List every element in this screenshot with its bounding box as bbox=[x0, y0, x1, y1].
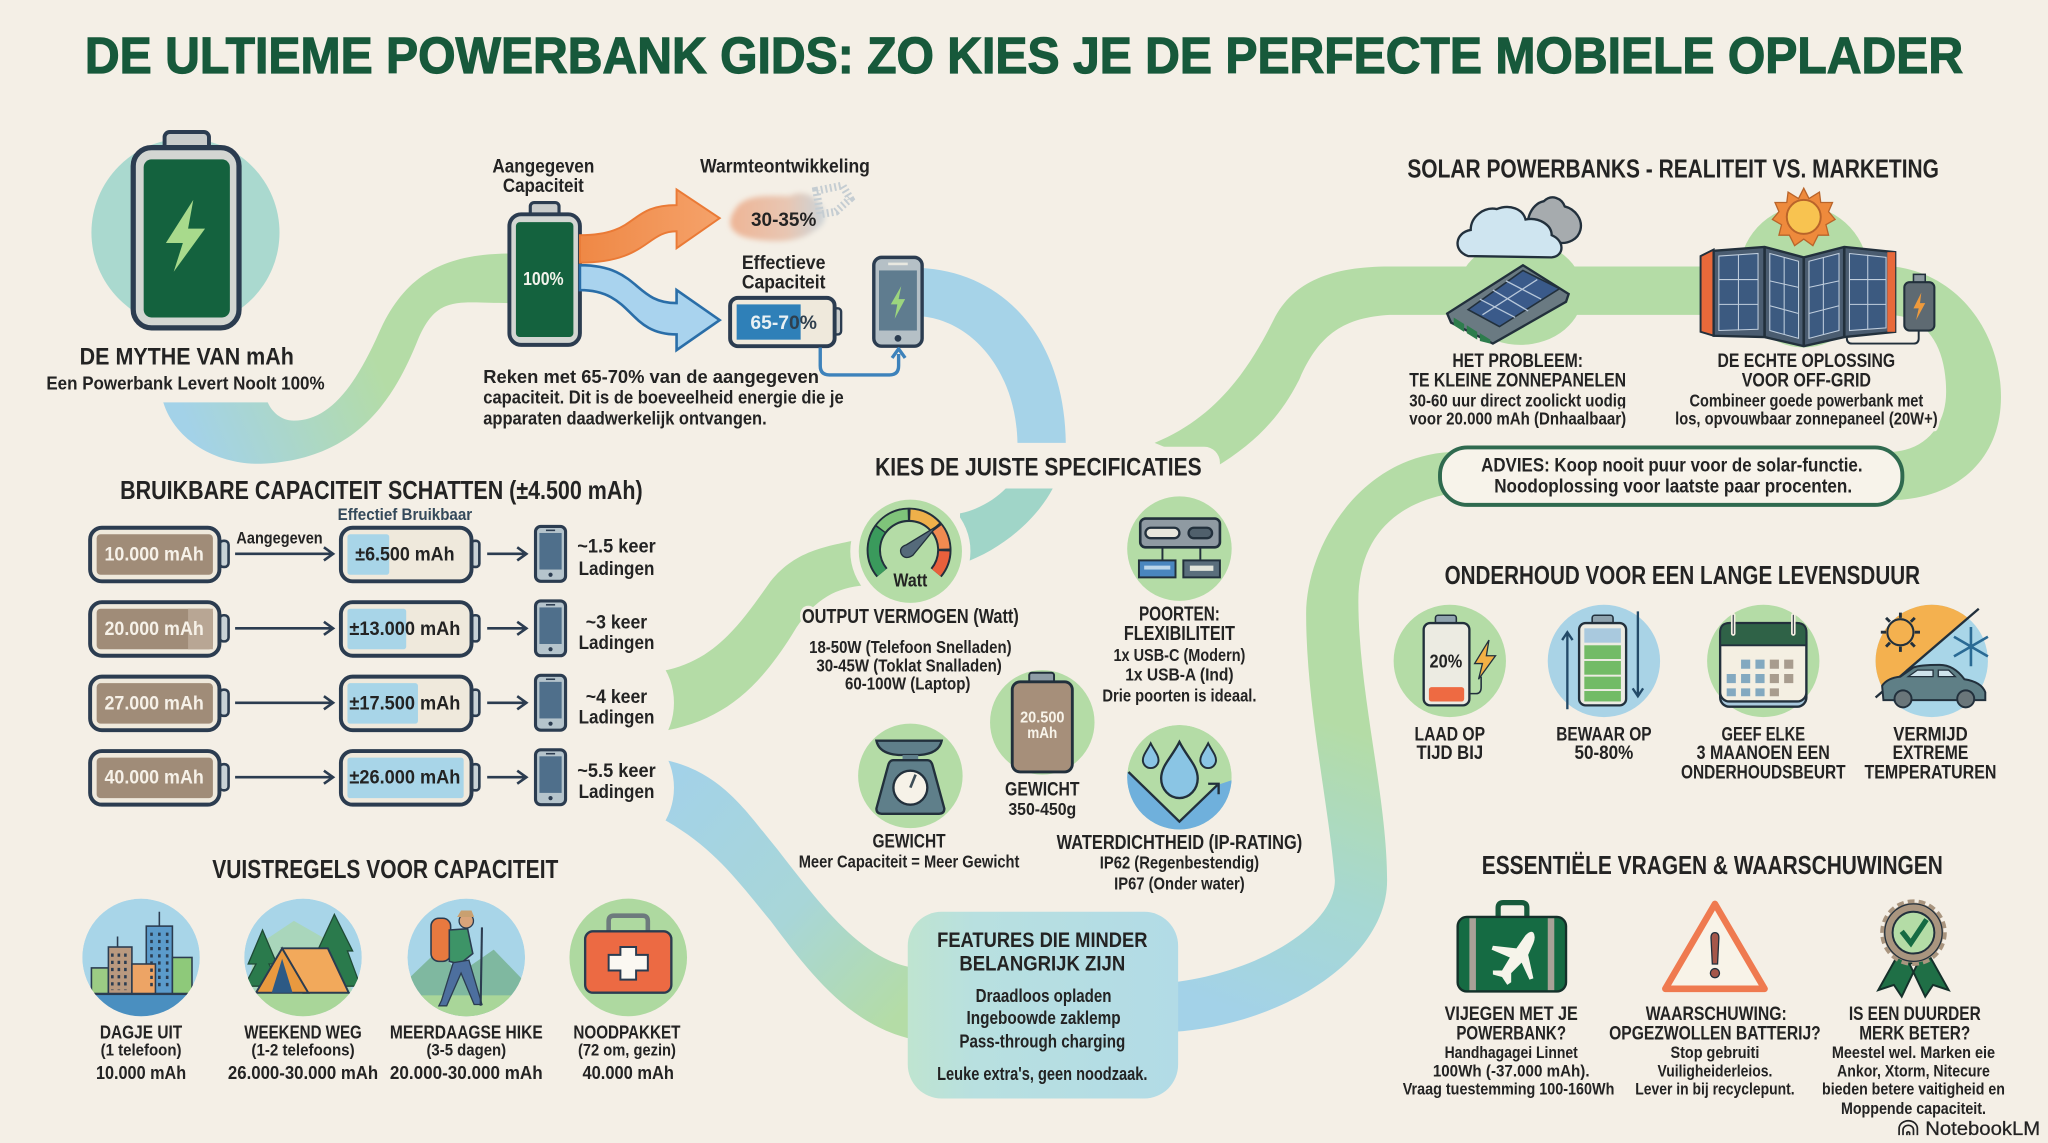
icon: big battery bbox=[91, 132, 280, 328]
text: vliegen met je powerbank: Vraag tuestemming 100-160Wh bbox=[1403, 1080, 1614, 1099]
heading: BELANGRIJK ZIJN bbox=[959, 951, 1125, 976]
text: het probleem bbox=[1409, 351, 1626, 429]
text: uitleg capaciteit bbox=[483, 366, 844, 429]
text: opgezwollen batterij: OPGEZWOLLEN BATTERIJ? bbox=[1609, 1024, 1821, 1045]
panel: solar powerbanks bbox=[1407, 156, 1939, 505]
callout: advies: Noodoplossing voor laatste paar procenten. bbox=[1494, 475, 1852, 497]
icon: hiker bbox=[408, 898, 525, 1016]
icon: capacity battery: 20.500 bbox=[1020, 709, 1065, 726]
label: meerdaagse hike: MEERDAAGSE HIKE bbox=[390, 1021, 543, 1042]
icon: scale bbox=[858, 724, 963, 828]
row: 20.000 mAh: Ladingen bbox=[579, 632, 654, 654]
text: waterdichtheid: IP67 (Onder water) bbox=[1114, 874, 1245, 894]
label: bewaar op: BEWAAR OP bbox=[1556, 725, 1652, 746]
row: 40.000 mAh: 40.000 mAh bbox=[104, 768, 204, 789]
label: noodpakket: NOODPAKKET bbox=[573, 1021, 680, 1042]
row: 10.000 mAh bbox=[90, 526, 656, 581]
icon: powerbank with cloud bbox=[1447, 197, 1583, 345]
icon: capacity battery bbox=[990, 670, 1095, 775]
callout: advies bbox=[1440, 447, 1902, 505]
text: vliegen met je powerbank: VIJEGEN MET JE bbox=[1445, 1004, 1578, 1025]
icon: laad op tijd bij bbox=[1394, 605, 1506, 717]
subtitle: Een Powerbank Levert Noolt 100% bbox=[46, 372, 325, 393]
text: de echte oplossing: DE ECHTE OPLOSSING bbox=[1718, 351, 1895, 372]
label: dagje uit: (1 telefoon) bbox=[101, 1040, 182, 1059]
row: 40.000 mAh: ~5.5 keer bbox=[577, 760, 656, 782]
row: 20.000 mAh bbox=[90, 601, 654, 656]
text: gewicht 350-450g: GEWICHT bbox=[1005, 778, 1080, 800]
text: poorten: Drie poorten is ideaal. bbox=[1102, 685, 1256, 705]
text: is een duurder merk beter bbox=[1822, 1004, 2005, 1118]
panel: features die minder belangrijk zijn bbox=[908, 912, 1178, 1099]
list: features: Draadloos opladen bbox=[976, 985, 1112, 1006]
icon: bewaar op 50-80% bbox=[1548, 605, 1660, 717]
text: gewicht 350-450g: 350-450g bbox=[1008, 799, 1076, 819]
text: is een duurder merk beter: Moppende capaciteit. bbox=[1841, 1099, 1986, 1118]
heading: de mythe: DE MYTHE VAN mAh bbox=[80, 343, 294, 370]
panel: capaciteit split diagram bbox=[483, 156, 922, 429]
text: output vermogen: 18-50W (Telefoon Snelladen) bbox=[809, 637, 1012, 657]
text: poorten: POORTEN: bbox=[1139, 603, 1220, 625]
label: bewaar op: 50-80% bbox=[1575, 743, 1633, 764]
label: geef elke 3 maanden: ONDERHOUDSBEURT bbox=[1681, 763, 1846, 784]
text: is een duurder merk beter: bieden betere vaitigheid en bbox=[1822, 1080, 2005, 1099]
panel: de mythe van mAh bbox=[46, 132, 325, 393]
row: 27.000 mAh: ±17.500 mAh bbox=[349, 693, 460, 714]
icon: tent bbox=[244, 899, 362, 1019]
text: is een duurder merk beter: MERK BETER? bbox=[1859, 1024, 1970, 1045]
icon: ports bbox=[1127, 496, 1232, 601]
icon: extreme temperatures bbox=[1874, 604, 1988, 718]
icon: heat cloud bbox=[730, 186, 850, 241]
label: vermijd extreme temperaturen: EXTREME bbox=[1893, 743, 1968, 764]
flow ribbon: specificaties to solar and advies bbox=[1155, 267, 2001, 500]
logo: NotebookLM: NotebookLM bbox=[1925, 1118, 2040, 1140]
label: effectieve capaciteit: Effectieve bbox=[742, 253, 825, 274]
label: laad op tijd bij: LAAD OP bbox=[1415, 725, 1485, 746]
icon: phone bbox=[874, 257, 922, 346]
text: output vermogen: 60-100W (Laptop) bbox=[845, 674, 970, 694]
row: 27.000 mAh bbox=[90, 675, 654, 730]
column label: effectief bruikbaar: Effectief Bruikbaar bbox=[338, 506, 473, 524]
callout: advies: ADVIES: Koop nooit puur voor de solar-functie. bbox=[1481, 455, 1863, 477]
label: geef elke 3 maanden: 3 MAANOEN EEN bbox=[1697, 743, 1830, 764]
flow ribbon: tabel to features bbox=[650, 758, 914, 1040]
label: aangegeven capaciteit bbox=[492, 156, 594, 197]
text: poorten bbox=[1102, 603, 1256, 705]
heading: VUISTREGELS VOOR CAPACITEIT bbox=[212, 856, 559, 884]
text: is een duurder merk beter: IS EEN DUURDER bbox=[1849, 1004, 1981, 1025]
text: het probleem: 30-60 uur direct zoolickt uodig bbox=[1409, 390, 1626, 410]
text: het probleem: voor 20.000 mAh (Dnhaalbaar) bbox=[1409, 409, 1626, 429]
text: opgezwollen batterij: WAARSCHUWING: bbox=[1646, 1004, 1787, 1025]
label: meerdaagse hike bbox=[390, 1021, 543, 1083]
label: vermijd extreme temperaturen: VERMIJD bbox=[1893, 725, 1968, 746]
label: vermijd extreme temperaturen: TEMPERATUREN bbox=[1864, 763, 1996, 784]
heading: FEATURES DIE MINDER bbox=[937, 927, 1148, 952]
label: meerdaagse hike: (3-5 dagen) bbox=[426, 1040, 506, 1059]
text: opgezwollen batterij bbox=[1609, 1004, 1821, 1099]
text: poorten: 1x USB-C (Modern) bbox=[1113, 645, 1245, 665]
icon: 65-70% battery: 65-70% bbox=[750, 312, 817, 334]
text: uitleg capaciteit: apparaten daadwerkelijk ontvangen. bbox=[483, 408, 767, 429]
text: uitleg capaciteit: Reken met 65-70% van de aangegeven bbox=[483, 366, 819, 387]
heading: ESSENTIËLE VRAGEN & WAARSCHUWINGEN bbox=[1482, 852, 1943, 880]
panel: bruikbare capaciteit schatten bbox=[90, 475, 656, 805]
icon: first aid kit bbox=[569, 899, 687, 1016]
heading: ONDERHOUD VOOR EEN LANGE LEVENSDUUR bbox=[1445, 562, 1920, 590]
column label: aangegeven: Aangegeven bbox=[236, 529, 323, 547]
label: effectieve capaciteit bbox=[742, 253, 826, 294]
text: de echte oplossing: Combineer goede powerbank met bbox=[1689, 390, 1923, 410]
text: gewicht: Meer Capaciteit = Meer Gewicht bbox=[799, 851, 1020, 871]
row: 40.000 mAh bbox=[90, 750, 656, 805]
text: vliegen met je powerbank bbox=[1403, 1004, 1614, 1099]
icon: watt gauge: Watt bbox=[893, 570, 927, 591]
row: 27.000 mAh: ~4 keer bbox=[586, 686, 648, 708]
flow ribbon: phone to specificaties bbox=[920, 268, 1066, 443]
label: weekend weg: 26.000-30.000 mAh bbox=[228, 1062, 378, 1083]
label: vermijd extreme temperaturen bbox=[1864, 725, 1996, 784]
text: gewicht: GEWICHT bbox=[872, 831, 946, 853]
flow ribbon: teal connector bbox=[960, 489, 1053, 564]
label: noodpakket: 40.000 mAh bbox=[583, 1062, 674, 1083]
text: poorten: FLEXIBILITEIT bbox=[1124, 623, 1235, 645]
text: de echte oplossing: los, opvouwbaar zonnepaneel (20W+) bbox=[1675, 409, 1938, 429]
text: uitleg capaciteit: capaciteit. Dit is de boeveelheid energie die je bbox=[483, 387, 844, 408]
label: dagje uit: 10.000 mAh bbox=[96, 1062, 186, 1083]
heading: KIES DE JUISTE SPECIFICATIES bbox=[875, 454, 1202, 481]
label: noodpakket bbox=[573, 1021, 680, 1083]
text: de echte oplossing: VOOR OFF-GRID bbox=[1742, 371, 1871, 392]
row: 40.000 mAh: Ladingen bbox=[579, 781, 654, 803]
label: weekend weg bbox=[228, 1021, 378, 1083]
heading backdrop bbox=[857, 447, 1220, 489]
row: 20.000 mAh: ~3 keer bbox=[586, 611, 648, 633]
text: opgezwollen batterij: Lever in bij recyclepunt. bbox=[1635, 1080, 1795, 1099]
label: laad op tijd bij: TIJD BIJ bbox=[1416, 743, 1483, 764]
icon: 100% battery bbox=[509, 203, 580, 345]
heading: BRUIKBARE CAPACITEIT SCHATTEN (±4.500 mAh) bbox=[120, 475, 643, 505]
icon: calendar bbox=[1707, 605, 1819, 717]
text: vliegen met je powerbank: Handhagagei Linnet bbox=[1445, 1043, 1578, 1062]
text: waterdichtheid bbox=[1057, 832, 1302, 894]
text: waterdichtheid: IP62 (Regenbestendig) bbox=[1100, 853, 1259, 873]
list: features: Leuke extra's, geen noodzaak. bbox=[937, 1063, 1147, 1084]
label: warmteontwikkeling: Warmteontwikkeling bbox=[700, 156, 870, 177]
label: geef elke 3 maanden bbox=[1681, 725, 1846, 784]
row: 10.000 mAh: Ladingen bbox=[579, 558, 654, 580]
text: de echte oplossing bbox=[1675, 351, 1938, 429]
label: aangegeven capaciteit: Aangegeven bbox=[492, 156, 594, 177]
text: output vermogen: 30-45W (Toklat Snalladen) bbox=[816, 655, 1002, 675]
icon: laad op tijd bij: 20% bbox=[1430, 650, 1462, 671]
text: het probleem: HET PROBLEEM: bbox=[1452, 351, 1583, 372]
label: weekend weg: WEEKEND WEG bbox=[244, 1021, 362, 1042]
text: is een duurder merk beter: Meestel wel. Marken eie bbox=[1832, 1043, 1995, 1062]
panel: kies de juiste specificaties bbox=[799, 447, 1302, 894]
heading bbox=[937, 927, 1148, 976]
text: opgezwollen batterij: Stop gebruiti bbox=[1671, 1043, 1759, 1062]
icon: capacity battery: mAh bbox=[1027, 725, 1057, 742]
row: 27.000 mAh: 27.000 mAh bbox=[104, 693, 204, 714]
row: 10.000 mAh: ~1.5 keer bbox=[577, 536, 656, 558]
label: aangegeven capaciteit: Capaciteit bbox=[503, 176, 584, 197]
text: waterdichtheid: WATERDICHTHEID (IP-RATING) bbox=[1057, 832, 1302, 854]
arrow: effectief bbox=[580, 265, 720, 350]
label: effectieve capaciteit: Capaciteit bbox=[742, 273, 826, 294]
text: output vermogen bbox=[802, 606, 1019, 694]
text: output vermogen: OUTPUT VERMOGEN (Watt) bbox=[802, 606, 1019, 628]
icon: city bbox=[78, 899, 204, 1019]
heading: SOLAR POWERBANKS - REALITEIT VS. MARKETING bbox=[1407, 156, 1939, 184]
arrow: battery to phone bbox=[820, 348, 905, 375]
row: 10.000 mAh: ±6.500 mAh bbox=[355, 544, 455, 565]
list: features bbox=[937, 985, 1147, 1084]
row: 40.000 mAh: ±26.000 mAh bbox=[349, 768, 460, 789]
label: weekend weg: (1-2 telefoons) bbox=[251, 1040, 355, 1059]
panel: onderhoud voor een lange levensduur bbox=[1394, 562, 1998, 784]
list: features: Ingeboowde zaklemp bbox=[967, 1007, 1121, 1028]
icon: warning triangle bbox=[1665, 904, 1765, 989]
label: dagje uit: DAGJE UIT bbox=[100, 1021, 182, 1042]
text: vliegen met je powerbank: POWERBANK? bbox=[1456, 1024, 1566, 1045]
text: het probleem: TE KLEINE ZONNEPANELEN bbox=[1409, 371, 1626, 392]
label: bewaar op bbox=[1556, 725, 1652, 764]
row: 20.000 mAh: 20.000 mAh bbox=[104, 619, 204, 640]
label: noodpakket: (72 om, gezin) bbox=[578, 1040, 676, 1059]
icon: water drops bbox=[1127, 725, 1232, 830]
text: gewicht 350-450g bbox=[1005, 778, 1080, 819]
text: opgezwollen batterij: Vuiligheiderleios. bbox=[1657, 1061, 1772, 1080]
label: laad op tijd bij bbox=[1415, 725, 1485, 764]
flow ribbon: features to advies bbox=[1173, 452, 1450, 1032]
label: dagje uit bbox=[96, 1021, 186, 1083]
icon: 65-70% battery bbox=[730, 298, 841, 346]
icon: suitcase with plane bbox=[1458, 903, 1566, 991]
text: is een duurder merk beter: Ankor, Xtorm, Nitecure bbox=[1837, 1061, 1990, 1080]
icon: 100% battery: 100% bbox=[523, 268, 564, 289]
icon: heat cloud: 30-35% bbox=[751, 209, 816, 231]
text: poorten: 1x USB-A (Ind) bbox=[1125, 665, 1234, 685]
icon: watt gauge bbox=[850, 491, 970, 611]
title: DE ULTIEME POWERBANK GIDS: ZO KIES JE DE PERFECTE MOBIELE OPLADER bbox=[85, 27, 1963, 84]
list: features: Pass-through charging bbox=[959, 1031, 1125, 1052]
arrow: warmte bbox=[580, 189, 720, 263]
label: meerdaagse hike: 20.000-30.000 mAh bbox=[390, 1062, 543, 1083]
row: 10.000 mAh: 10.000 mAh bbox=[104, 544, 204, 565]
icon: quality badge bbox=[1878, 903, 1949, 997]
panel: essentiele vragen en waarschuwingen bbox=[1403, 852, 2005, 1118]
row: 27.000 mAh: Ladingen bbox=[579, 707, 654, 729]
text: gewicht bbox=[799, 831, 1020, 871]
row: 20.000 mAh: ±13.000 mAh bbox=[349, 619, 460, 640]
flow ribbon: mythe to capaciteit bbox=[163, 253, 512, 464]
panel: vuistregels voor capaciteit bbox=[78, 856, 687, 1083]
label: geef elke 3 maanden: GEEF ELKE bbox=[1721, 725, 1805, 746]
flow ribbon: capaciteit tabel to specificaties bbox=[650, 538, 865, 733]
icon: foldable solar panel with sun bbox=[1701, 188, 1934, 348]
text: vliegen met je powerbank: 100Wh (-37.000 mAh). bbox=[1433, 1061, 1590, 1080]
